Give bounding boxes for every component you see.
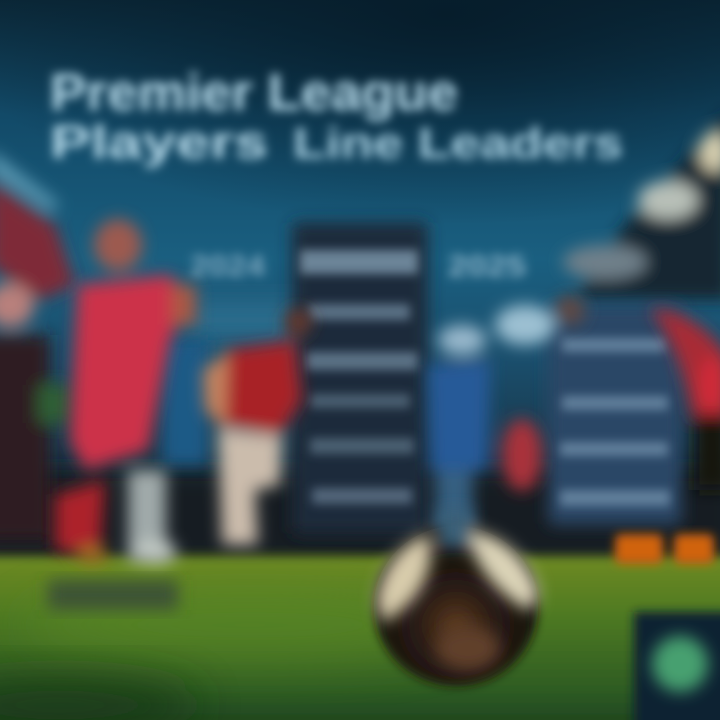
title: Line Leaders — [293, 119, 623, 168]
player: blue kit — [428, 295, 585, 535]
player: left red striker — [55, 219, 208, 564]
icon: green shield — [652, 636, 708, 692]
table rows — [560, 338, 670, 506]
logo badge — [634, 612, 720, 720]
panel: centre stats table — [292, 222, 428, 534]
title: Players — [50, 116, 268, 168]
left stadium stand — [0, 150, 75, 540]
title: Premier League — [50, 64, 458, 122]
table header labels: 2024 — [190, 250, 265, 283]
bottom left caption box — [48, 580, 178, 610]
title — [50, 64, 623, 168]
title: Players — [50, 116, 268, 168]
orange sideline boards — [615, 534, 714, 564]
table rows — [300, 250, 418, 504]
player: right red kit — [650, 308, 720, 490]
title: Premier League — [50, 64, 458, 122]
blue background strip — [162, 340, 208, 465]
player: centre red and white — [203, 308, 312, 545]
football — [374, 510, 538, 686]
pitch grass — [0, 556, 720, 720]
panel: right stats table — [548, 305, 682, 525]
right stadium lights — [563, 110, 720, 300]
table header labels: 2025 — [448, 250, 526, 283]
table header labels — [190, 250, 526, 283]
